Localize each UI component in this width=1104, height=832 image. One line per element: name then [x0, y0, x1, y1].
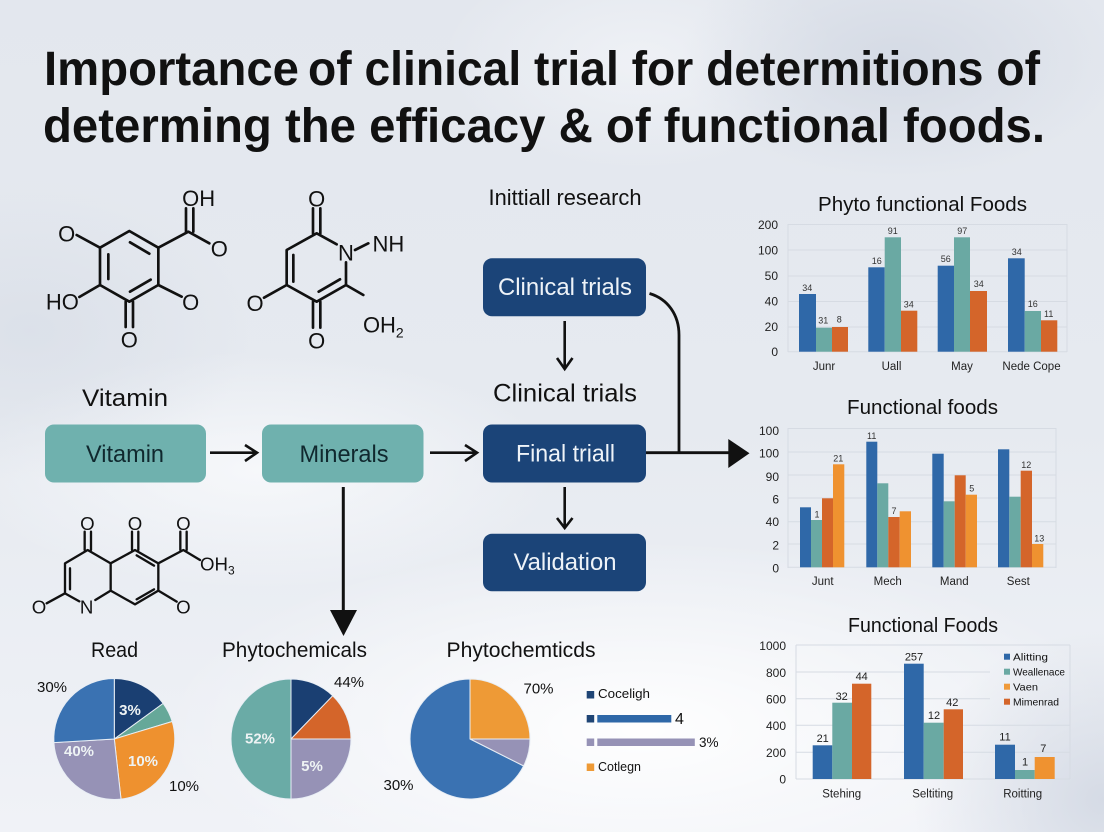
title: determing the efficacy & of functional foods. — [43, 100, 1045, 153]
axis labels: 100 — [759, 424, 779, 438]
data labels: 7 — [1040, 743, 1046, 755]
box: minerals — [262, 424, 424, 482]
axis labels: Seltiting — [912, 788, 953, 800]
pie chart: read: 10% — [169, 778, 199, 795]
axis labels — [759, 424, 1031, 588]
molecule: top middle structure: O — [308, 187, 325, 212]
title: Importance — [44, 43, 299, 96]
heading: functional foods: Functional foods — [847, 397, 998, 419]
arrow: final trial down — [557, 487, 572, 528]
axis labels: 100 — [758, 244, 778, 258]
bar chart: phyto functional foods — [758, 194, 1067, 373]
bars — [799, 237, 1057, 352]
molecule: lower left structure: O — [176, 597, 191, 618]
arrow: minerals to final trial — [430, 445, 477, 461]
box: minerals: Minerals — [300, 441, 388, 468]
data labels: 257 — [905, 652, 923, 664]
molecule: lower left structure — [32, 513, 235, 618]
data labels: 34 — [904, 300, 914, 310]
legend: Vaen — [1013, 682, 1038, 694]
heading: phyto functional foods: Phyto functional Foods — [818, 194, 1027, 216]
title — [43, 43, 1045, 153]
molecule: top left structure: O — [211, 237, 228, 262]
molecule: top middle structure: O — [246, 291, 264, 316]
axis labels: Nede Cope — [1002, 361, 1061, 373]
axis labels: 40 — [765, 294, 778, 308]
axis labels: 0 — [779, 772, 786, 786]
data labels: 16 — [1028, 299, 1038, 309]
pie chart: phytochemicals — [222, 639, 367, 799]
box: vitamin: Vitamin — [86, 441, 164, 468]
box: validation: Validation — [514, 549, 616, 576]
pie chart: phytochemicals: 5% — [301, 758, 323, 775]
molecule: top middle structure — [246, 187, 404, 353]
molecule: top middle structure: O — [308, 328, 325, 353]
axis labels: Stehing — [822, 788, 861, 800]
molecule: lower left structure: N — [80, 597, 93, 618]
molecule: top left structure: HO — [46, 290, 79, 315]
data labels: 12 — [1021, 460, 1031, 470]
data labels: 91 — [888, 226, 898, 236]
axis labels: Uall — [882, 361, 901, 373]
pie chart: phytochemicals: 52% — [245, 730, 275, 748]
heading: phytochemticds: Phytochemticds — [446, 639, 596, 662]
molecule: top left structure: O — [182, 290, 199, 315]
data labels: 44 — [856, 671, 868, 683]
data labels: 12 — [928, 710, 940, 722]
molecule: top middle structure: OH — [363, 313, 396, 338]
molecule: top left structure: O — [58, 221, 75, 246]
legend: pie bars: Coceligh — [598, 686, 650, 701]
axis labels: Mand — [940, 576, 969, 588]
molecule: lower left structure: 3 — [228, 563, 235, 577]
arrow: vitamin to minerals — [210, 445, 257, 461]
pie slices: phytochemicals — [231, 679, 351, 799]
axis labels: 200 — [758, 218, 778, 232]
legend — [1004, 652, 1065, 708]
legend: Alitting — [1013, 652, 1048, 664]
axis labels — [758, 218, 1061, 373]
data labels: 34 — [802, 283, 812, 293]
data labels: 32 — [836, 691, 848, 703]
data labels: 1 — [1022, 756, 1028, 768]
axis labels: Junt — [812, 576, 834, 588]
data labels: 34 — [974, 279, 984, 289]
axis labels: 600 — [766, 692, 786, 706]
molecule: lower left structure: OH — [200, 553, 228, 574]
data labels: 97 — [957, 226, 967, 236]
axis labels: 20 — [765, 320, 778, 334]
pie chart: read: 30% — [37, 679, 67, 696]
data labels: 11 — [867, 431, 876, 441]
molecule: lower left structure: O — [32, 597, 46, 618]
arrow: curved connector and output to charts — [646, 294, 750, 468]
data labels: 8 — [837, 314, 842, 324]
pie chart: read: 10% — [128, 753, 158, 770]
data labels: 13 — [1034, 534, 1044, 544]
data labels: 21 — [833, 454, 843, 464]
axis labels: 6 — [772, 492, 779, 506]
pie chart: phytochemicals: 44% — [334, 674, 364, 691]
heading: initial research: Inittiall research — [488, 185, 642, 210]
pie chart: phytochemticds — [383, 639, 596, 799]
data labels: 1 — [814, 510, 820, 520]
bar chart: functional foods — [759, 397, 1056, 588]
pie slices: read — [54, 678, 175, 799]
molecule: top middle structure: NH — [372, 232, 404, 257]
axis labels: Mech — [874, 576, 902, 588]
box: clinical trials: Clinical trials — [498, 274, 632, 301]
pie slices: phytochemticds — [410, 679, 530, 799]
heading: read: Read — [91, 639, 138, 662]
box: vitamin — [45, 424, 206, 482]
heading: functional foods: Functional Foods — [848, 615, 998, 637]
axis labels: May — [951, 361, 973, 373]
axis labels: 0 — [771, 345, 778, 359]
pie chart: phytochemticds: 30% — [383, 777, 414, 794]
data labels: 11 — [1044, 309, 1053, 319]
molecule: top middle structure: N — [338, 241, 354, 266]
axis labels: Roitting — [1003, 788, 1042, 800]
heading: clinical trials: Clinical trials — [493, 380, 637, 408]
axis labels: Junr — [813, 361, 835, 373]
data labels: 11 — [999, 732, 1011, 744]
axis labels: 800 — [766, 666, 786, 680]
axis labels: 50 — [765, 269, 778, 283]
bar chart: functional foods categories — [759, 615, 1070, 800]
molecule: top middle structure: 2 — [396, 324, 404, 340]
box: clinical trials — [483, 258, 646, 316]
molecule: lower left structure: O — [80, 513, 95, 534]
data labels — [814, 431, 1044, 544]
legend: pie bars: 4 — [675, 711, 684, 728]
axis labels: 2 — [772, 538, 779, 552]
molecule: lower left structure: O — [128, 513, 142, 534]
arrow: clinical trials down — [557, 321, 572, 369]
pie chart: read: 40% — [64, 743, 94, 760]
molecule: top left structure: OH — [182, 186, 215, 211]
axis labels: 100 — [759, 446, 779, 460]
molecule: top left structure: O — [121, 327, 138, 352]
box: validation — [483, 534, 646, 591]
data labels: 21 — [817, 733, 829, 745]
box: final trial — [483, 424, 646, 482]
data labels: 42 — [946, 697, 958, 709]
legend: pie bars — [587, 686, 719, 774]
bars — [813, 664, 1055, 779]
data labels — [802, 226, 1053, 326]
data labels: 5 — [969, 484, 974, 494]
pie chart: phytochemticds: 70% — [523, 680, 554, 698]
heading: vitamin: Vitamin — [82, 385, 168, 412]
data labels — [817, 652, 1046, 768]
bars — [800, 442, 1043, 567]
molecule: lower left structure: O — [176, 513, 191, 534]
axis labels: 200 — [766, 746, 786, 760]
axis labels: Sest — [1007, 576, 1031, 588]
box: final trial: Final triall — [516, 440, 615, 468]
data labels: 31 — [818, 316, 828, 326]
data labels: 7 — [891, 506, 897, 516]
data labels: 56 — [941, 254, 951, 264]
axis labels: 40 — [766, 515, 779, 529]
arrow: minerals down to phytochemicals — [330, 487, 357, 636]
data labels: 34 — [1012, 247, 1022, 257]
legend: Weallenace — [1013, 666, 1065, 678]
legend: pie bars: 3% — [699, 735, 719, 750]
axis labels: 0 — [772, 562, 779, 576]
legend: Mimenrad — [1013, 696, 1059, 708]
legend: pie bars: Cotlegn — [598, 759, 641, 774]
pie chart: read — [37, 639, 199, 799]
pie chart: read: 3% — [119, 702, 141, 719]
axis labels: 400 — [766, 719, 786, 733]
axis labels: 1000 — [759, 639, 786, 653]
molecule: top left structure — [46, 186, 228, 352]
axis labels: 90 — [766, 470, 779, 484]
data labels: 16 — [872, 256, 882, 266]
title: of clinical trial for determitions of — [308, 43, 1041, 96]
heading: phytochemicals: Phytochemicals — [222, 639, 367, 662]
axis labels — [759, 639, 1042, 800]
